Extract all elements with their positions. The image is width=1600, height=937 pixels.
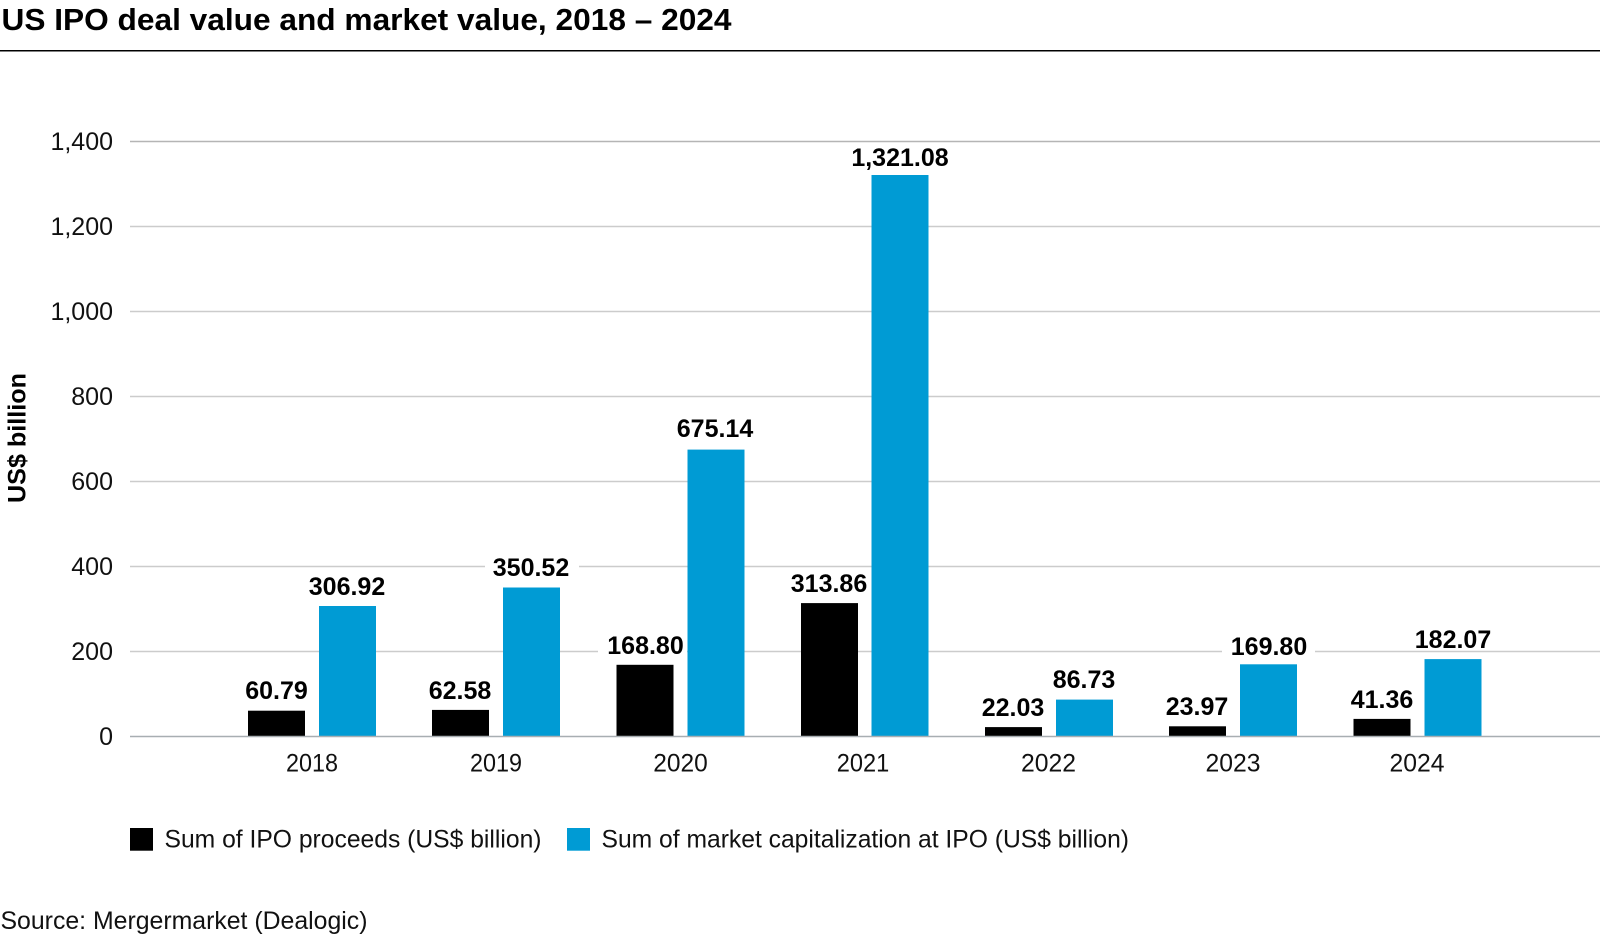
2024 group xyxy=(1351,626,1491,736)
y axis labels: 600 xyxy=(71,468,113,496)
2020 group: 168.80 xyxy=(607,632,684,660)
2020 group: 675.14 xyxy=(677,415,753,443)
y axis labels: 200 xyxy=(71,638,113,666)
2018 group xyxy=(245,573,385,736)
legend item: market capitalization: Sum of market capitalization at IPO (US$ billion) xyxy=(602,826,1129,854)
y axis labels: 0 xyxy=(99,723,113,751)
2022 group xyxy=(982,666,1115,736)
2023 group xyxy=(1166,633,1307,736)
2018 group: 60.79 xyxy=(245,677,308,705)
2021 group: 1,321.08 xyxy=(851,144,949,172)
y axis labels xyxy=(50,128,113,751)
y axis labels: 400 xyxy=(71,553,113,581)
2021 group: 313.86 xyxy=(791,570,867,598)
2023 group: 169.80 xyxy=(1231,633,1307,661)
x axis labels xyxy=(286,750,1445,778)
y axis labels: 1,000 xyxy=(50,298,113,326)
title: US IPO deal value and market value, 2018 – 2024 xyxy=(2,2,732,37)
y axis labels: 1,400 xyxy=(50,128,113,156)
2019 group: 62.58 xyxy=(429,677,491,705)
bar chart xyxy=(245,144,1491,736)
y axis labels: 1,200 xyxy=(50,213,113,241)
y axis title: US$ billion xyxy=(4,373,32,503)
y axis labels: 800 xyxy=(71,383,113,411)
source note: Source: Mergermarket (Dealogic) xyxy=(0,907,368,935)
2024 group: 41.36 xyxy=(1351,686,1413,714)
2019 group xyxy=(429,554,569,736)
legend xyxy=(130,826,1129,854)
x axis labels: 2020 xyxy=(653,750,708,778)
2022 group: 22.03 xyxy=(982,694,1044,722)
x axis labels: 2019 xyxy=(470,750,522,778)
2021 group xyxy=(791,144,949,736)
x axis labels: 2018 xyxy=(286,750,338,778)
x axis labels: 2024 xyxy=(1390,750,1445,778)
2020 group xyxy=(607,415,753,736)
x axis labels: 2022 xyxy=(1021,750,1076,778)
legend item: IPO proceeds: Sum of IPO proceeds (US$ billion) xyxy=(164,826,542,854)
2023 group: 23.97 xyxy=(1166,693,1228,721)
2022 group: 86.73 xyxy=(1053,666,1115,694)
2019 group: 350.52 xyxy=(493,554,569,582)
x axis labels: 2023 xyxy=(1206,750,1260,778)
x axis labels: 2021 xyxy=(837,750,889,778)
2024 group: 182.07 xyxy=(1415,626,1491,654)
2018 group: 306.92 xyxy=(309,573,385,601)
